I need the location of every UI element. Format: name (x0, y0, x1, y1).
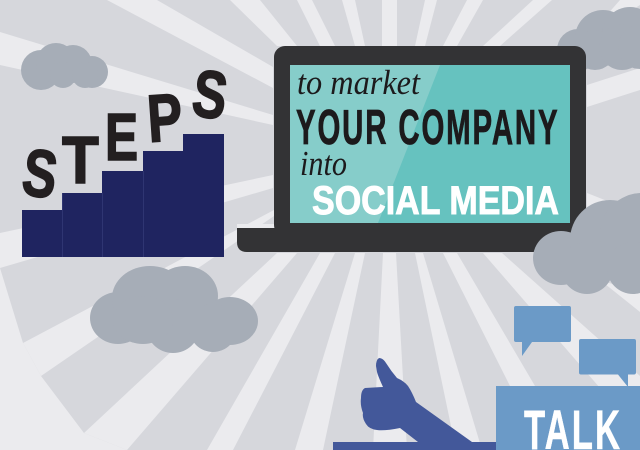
cloud: top left (21, 43, 108, 90)
heading: STEPS: T (62, 122, 99, 198)
laptop screen (290, 65, 570, 223)
speech bubble: right (579, 339, 636, 387)
icon: thumbs up with sleeve (333, 358, 497, 450)
title line: YOUR COMPANY: YOUR COMPANY (296, 99, 558, 155)
callout: TALK box (496, 386, 640, 450)
heading: STEPS (18, 55, 232, 213)
laptop (237, 46, 600, 252)
cloud: top right (557, 7, 640, 71)
title line: to market: to market (297, 63, 421, 102)
heading: STEPS: E (105, 101, 138, 175)
heading: STEPS: P (145, 79, 185, 156)
heading: STEPS: S (188, 55, 232, 134)
title line: into: into (300, 144, 347, 183)
heading: STEPS: S (18, 134, 62, 213)
cloud: bottom right (533, 193, 640, 294)
title text on screen (296, 63, 559, 223)
speech bubble: left (514, 306, 571, 356)
cloud: center (90, 266, 258, 353)
staircase bars (22, 134, 224, 257)
title line: SOCIAL MEDIA: SOCIAL MEDIA (312, 179, 559, 223)
